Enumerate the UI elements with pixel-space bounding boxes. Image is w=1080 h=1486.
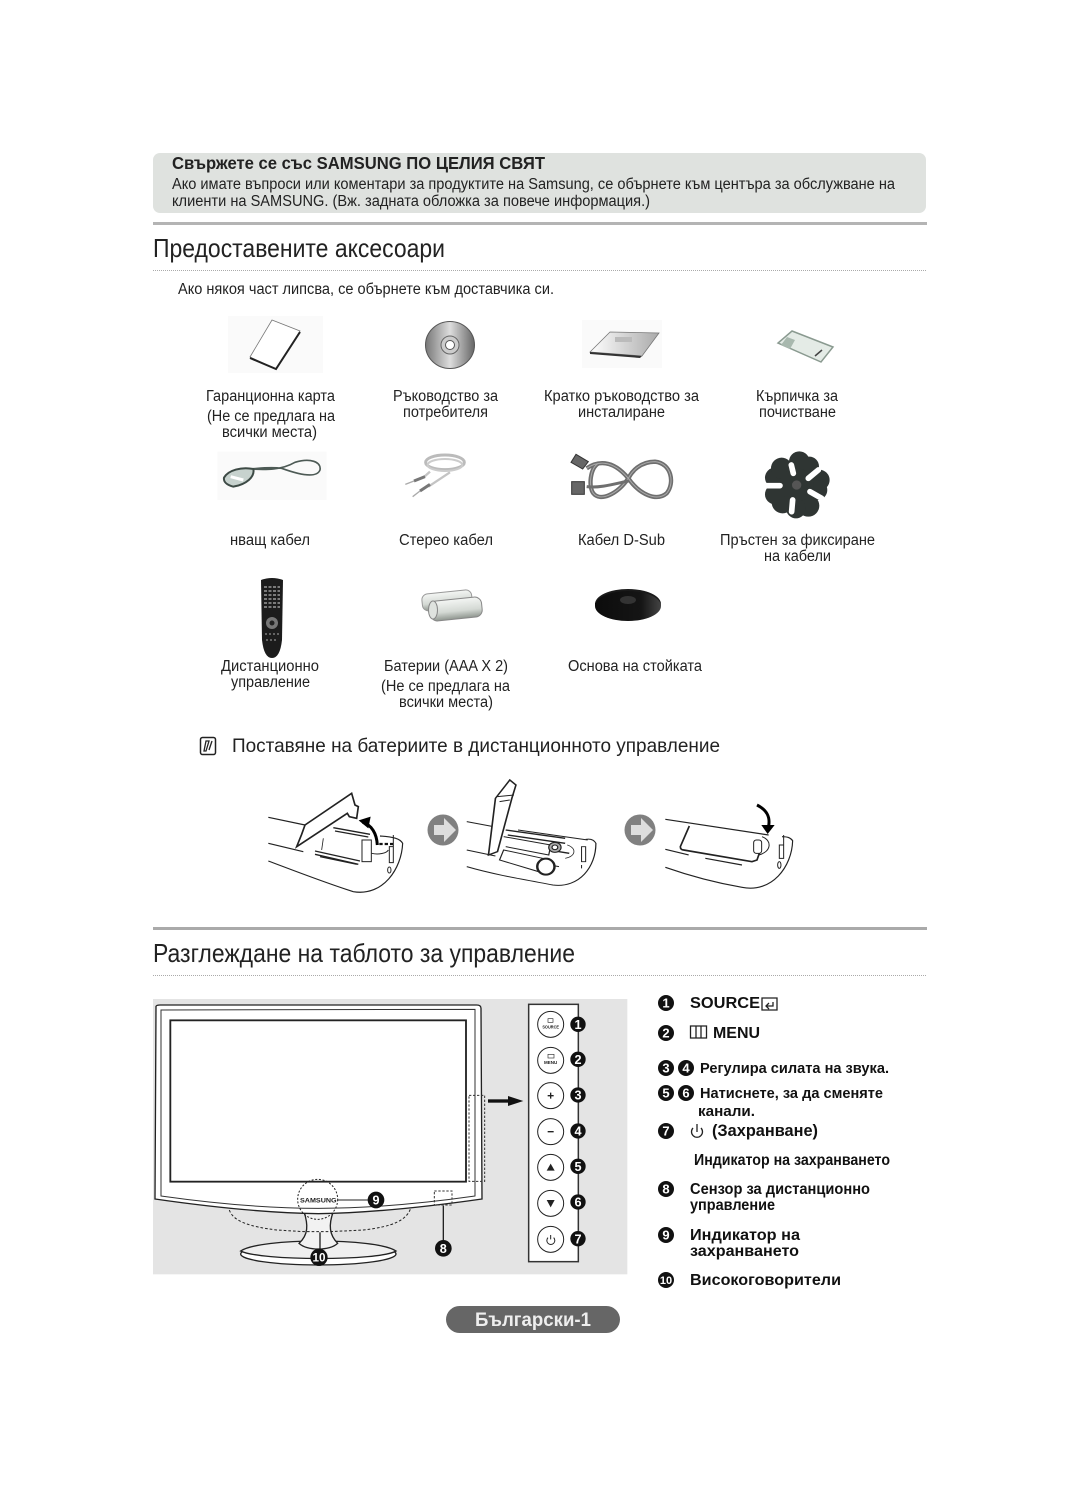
legend item 1: source: 1 — [662, 996, 670, 1010]
legend item 2: menu: 2 — [662, 1026, 670, 1040]
illustration: open battery cover — [268, 793, 403, 892]
button panel: 1 — [574, 1018, 582, 1032]
legend item 7: power: Индикатор на захранването — [694, 1152, 890, 1169]
arrow: step 1 to 2 — [428, 814, 458, 846]
illustration: inserting batteries — [467, 780, 596, 885]
button panel — [529, 1004, 586, 1262]
heading: supplied accessories: Предоставените аксесоари — [153, 233, 445, 263]
button panel: 6 — [574, 1196, 582, 1210]
captions: accessory row 3: Батерии (AAA X 2) — [384, 658, 508, 675]
legend item 9: power indicator: Индикатор на — [690, 1227, 800, 1244]
legend item 9: power indicator — [658, 1227, 800, 1260]
button panel: 3 — [574, 1089, 582, 1103]
contact body text: Ако имате въпроси или коментари за продуктите на Samsung, се обърнете към центъра за обслужване на — [172, 176, 895, 193]
badge 8: 8 — [440, 1242, 447, 1256]
button panel: 2 — [574, 1053, 582, 1067]
legend item 5-6: channels: 6 — [682, 1086, 690, 1100]
badge 8 — [435, 1240, 452, 1257]
legend item 5-6: channels: 5 — [662, 1086, 670, 1100]
heading: control panel overview: Разглеждане на таблото за управление — [153, 938, 575, 968]
panel: contact Samsung worldwide — [153, 153, 926, 213]
captions: accessory row 3: Дистанционно — [221, 658, 319, 675]
icon: cable holder ring — [765, 451, 830, 518]
icon: power cable — [217, 452, 327, 500]
captions: accessory row 2: Кабел D-Sub — [578, 532, 665, 549]
captions: accessory row 1: Ръководство за — [393, 388, 498, 405]
arrow: step 2 to 3 — [624, 814, 656, 846]
badge 9: 9 — [372, 1194, 380, 1208]
legend item 3-4: volume: 4 — [682, 1060, 690, 1076]
legend item 8: remote sensor: управление — [690, 1197, 775, 1214]
icon: user manual CD — [426, 322, 474, 368]
icon: quick setup guide — [582, 320, 662, 368]
legend item 1: source — [658, 995, 777, 1012]
button panel: SOURCE — [542, 1024, 560, 1030]
captions: accessory row 3 — [221, 658, 702, 711]
legend item 2: menu: MENU — [713, 1025, 760, 1042]
arrow to button panel — [488, 1096, 523, 1106]
captions: accessory row 1 — [206, 388, 838, 441]
legend item 9: power indicator: 9 — [662, 1228, 670, 1242]
page number pill — [446, 1306, 620, 1333]
diagram: monitor front and control buttons — [153, 999, 627, 1274]
icon: stereo cable — [405, 455, 464, 497]
captions: accessory row 1: Кратко ръководство за — [544, 388, 699, 405]
legend item 7: power: 7 — [662, 1124, 670, 1138]
captions: accessory row 1: всички места) — [222, 424, 317, 441]
captions: accessory row 1: потребителя — [403, 404, 488, 421]
captions: accessory row 1: инсталиране — [578, 404, 665, 421]
icon: cleaning cloth — [778, 331, 833, 362]
button panel: MENU — [544, 1060, 558, 1066]
captions: accessory row 2: на кабели — [764, 548, 831, 565]
monitor screen — [170, 1020, 466, 1182]
contact heading: Свържете се със SAMSUNG ПО ЦЕЛИЯ СВЯТ — [172, 153, 545, 173]
icon: remote control — [261, 578, 283, 658]
legend item 8: remote sensor: Сензор за дистанционно — [690, 1181, 870, 1198]
note: missing part: Ако някоя част липсва, се обърнете към доставчика си. — [178, 281, 554, 298]
legend item 5-6: channels: Натиснете, за да сменяте — [700, 1085, 883, 1102]
icon: warranty card — [228, 316, 323, 373]
badge 10 — [310, 1249, 328, 1266]
captions: accessory row 2: нващ кабел — [230, 532, 310, 549]
legend item 9: power indicator: захранването — [690, 1243, 799, 1260]
legend item 10: speakers: Високоговорители — [690, 1272, 841, 1289]
captions: accessory row 1: Гаранционна карта — [206, 388, 335, 405]
captions: accessory row 1: (Не се предлага на — [207, 408, 335, 425]
badge 10: 10 — [313, 1252, 325, 1265]
legend item 3-4: volume: Регулира силата на звука. — [700, 1060, 889, 1077]
icon: D-Sub cable — [571, 454, 671, 497]
legend item 5-6: channels: канали. — [698, 1103, 755, 1120]
captions: accessory row 1: почистване — [759, 404, 836, 421]
page number pill: Български-1 — [475, 1310, 591, 1331]
monitor stand — [241, 1212, 396, 1265]
legend item 10: speakers: 10 — [660, 1275, 672, 1287]
legend item 7: power — [658, 1122, 890, 1169]
legend item 7: power: (Захранване) — [712, 1122, 818, 1140]
monitor bezel — [155, 1005, 482, 1214]
Samsung logo: SAMSUNG — [300, 1197, 337, 1204]
legend item 3-4: volume: 3 — [662, 1060, 670, 1076]
illustration: closing battery cover — [665, 805, 793, 888]
captions: accessory row 2 — [230, 532, 875, 565]
legend item 5-6: channels — [658, 1085, 883, 1120]
icon: stand base — [595, 589, 661, 621]
captions: accessory row 2: Стерео кабел — [399, 532, 493, 549]
captions: accessory row 3: Основа на стойката — [568, 658, 702, 675]
legend item 2: menu — [658, 1025, 760, 1042]
contact body text: клиенти на SAMSUNG. (Вж. задната обложка за повече информация.) — [172, 193, 650, 210]
button panel: 7 — [574, 1232, 582, 1246]
legend item 8: remote sensor: 8 — [662, 1182, 670, 1196]
legend: control descriptions — [658, 995, 890, 1289]
captions: accessory row 2: Пръстен за фиксиране — [720, 532, 875, 549]
icon: AAA batteries — [421, 589, 483, 622]
contact body text — [172, 176, 895, 210]
button panel: 4 — [574, 1125, 582, 1139]
button panel: 5 — [574, 1160, 582, 1174]
subheading: inserting batteries: Поставяне на батериите в дистанционното управление — [232, 735, 720, 757]
legend item 8: remote sensor — [658, 1181, 870, 1214]
icon: note — [200, 738, 216, 754]
captions: accessory row 3: (Не се предлага на — [381, 678, 510, 695]
legend item 1: source: SOURCE — [690, 995, 760, 1012]
captions: accessory row 3: всички места) — [399, 694, 493, 711]
badge 9 — [368, 1192, 384, 1208]
captions: accessory row 3: управление — [231, 674, 310, 691]
captions: accessory row 1: Кърпичка за — [756, 388, 838, 405]
